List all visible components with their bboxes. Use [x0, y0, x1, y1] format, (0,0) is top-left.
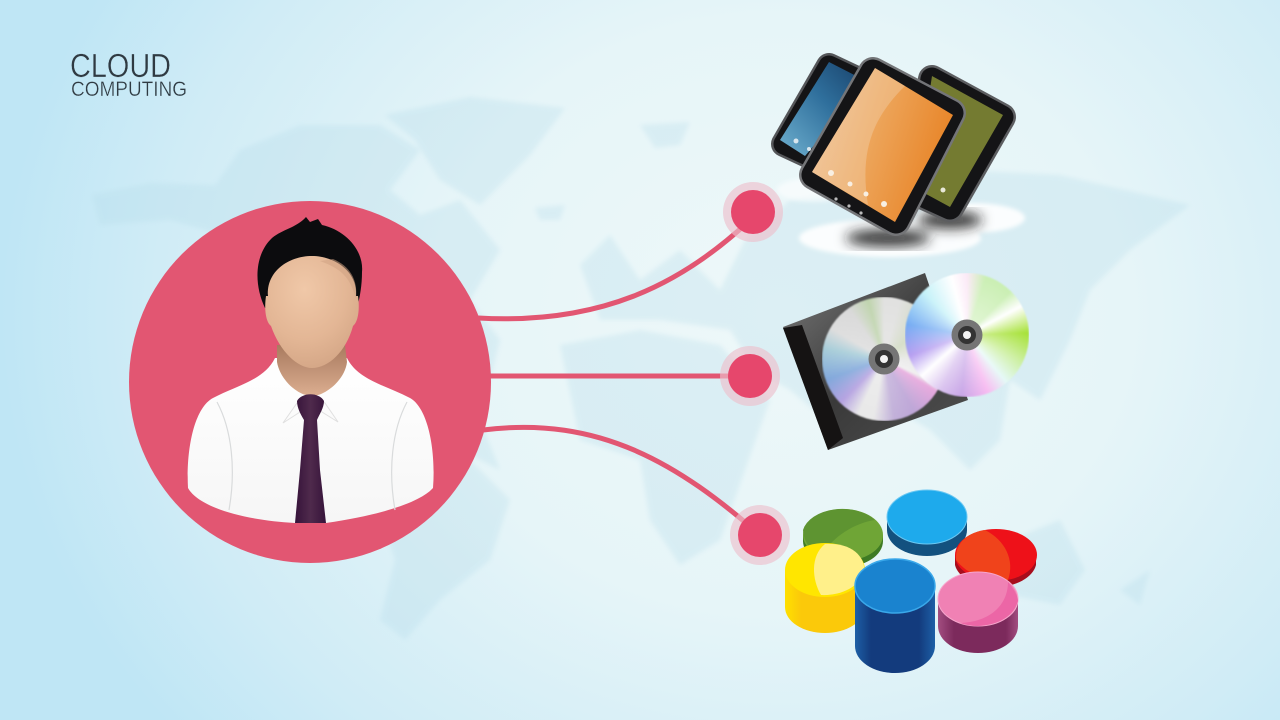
disc rear hub — [868, 344, 900, 374]
tablet reflections — [777, 178, 1025, 257]
world map — [92, 97, 1190, 640]
icon: tablets — [777, 62, 1025, 257]
disc front hub — [952, 320, 982, 350]
tablet: orange front — [812, 68, 953, 222]
logo word: COMPUTING: COMPUTING — [71, 78, 187, 101]
icon: discs — [783, 273, 1029, 450]
neck — [277, 345, 347, 396]
hair — [257, 217, 362, 308]
person avatar — [129, 201, 491, 563]
line to discs — [488, 374, 750, 378]
case spine — [783, 325, 843, 450]
collar — [283, 396, 338, 423]
cylinder: light blue — [887, 490, 967, 556]
cylinder: pink — [938, 572, 1018, 653]
logo word: CLOUD: CLOUD — [70, 47, 171, 84]
line to databases — [483, 427, 760, 535]
disc rear — [822, 297, 946, 421]
shirt sleeve seams — [217, 402, 407, 510]
node: databases — [730, 505, 790, 565]
connector lines — [478, 222, 760, 535]
node: tablets — [723, 182, 783, 242]
cylinder: yellow — [785, 543, 865, 633]
shirt — [188, 358, 434, 523]
avatar circle — [129, 201, 491, 563]
icon: coloured databases — [785, 490, 1037, 673]
ears and face — [265, 256, 359, 368]
forehead shade — [320, 259, 356, 298]
disc front — [905, 273, 1029, 397]
line to tablets — [478, 222, 748, 319]
disc case — [783, 273, 968, 450]
tablet shadows — [846, 211, 982, 247]
tablet: blue — [780, 62, 880, 164]
node: discs — [720, 346, 780, 406]
cylinder: red — [955, 529, 1037, 587]
screen light curve — [812, 68, 905, 205]
cylinder: big blue — [855, 559, 935, 673]
logo: Cloud Computing — [70, 47, 187, 101]
cylinder: green — [803, 509, 883, 567]
tie — [295, 394, 326, 523]
tablet: olive — [915, 76, 1003, 208]
